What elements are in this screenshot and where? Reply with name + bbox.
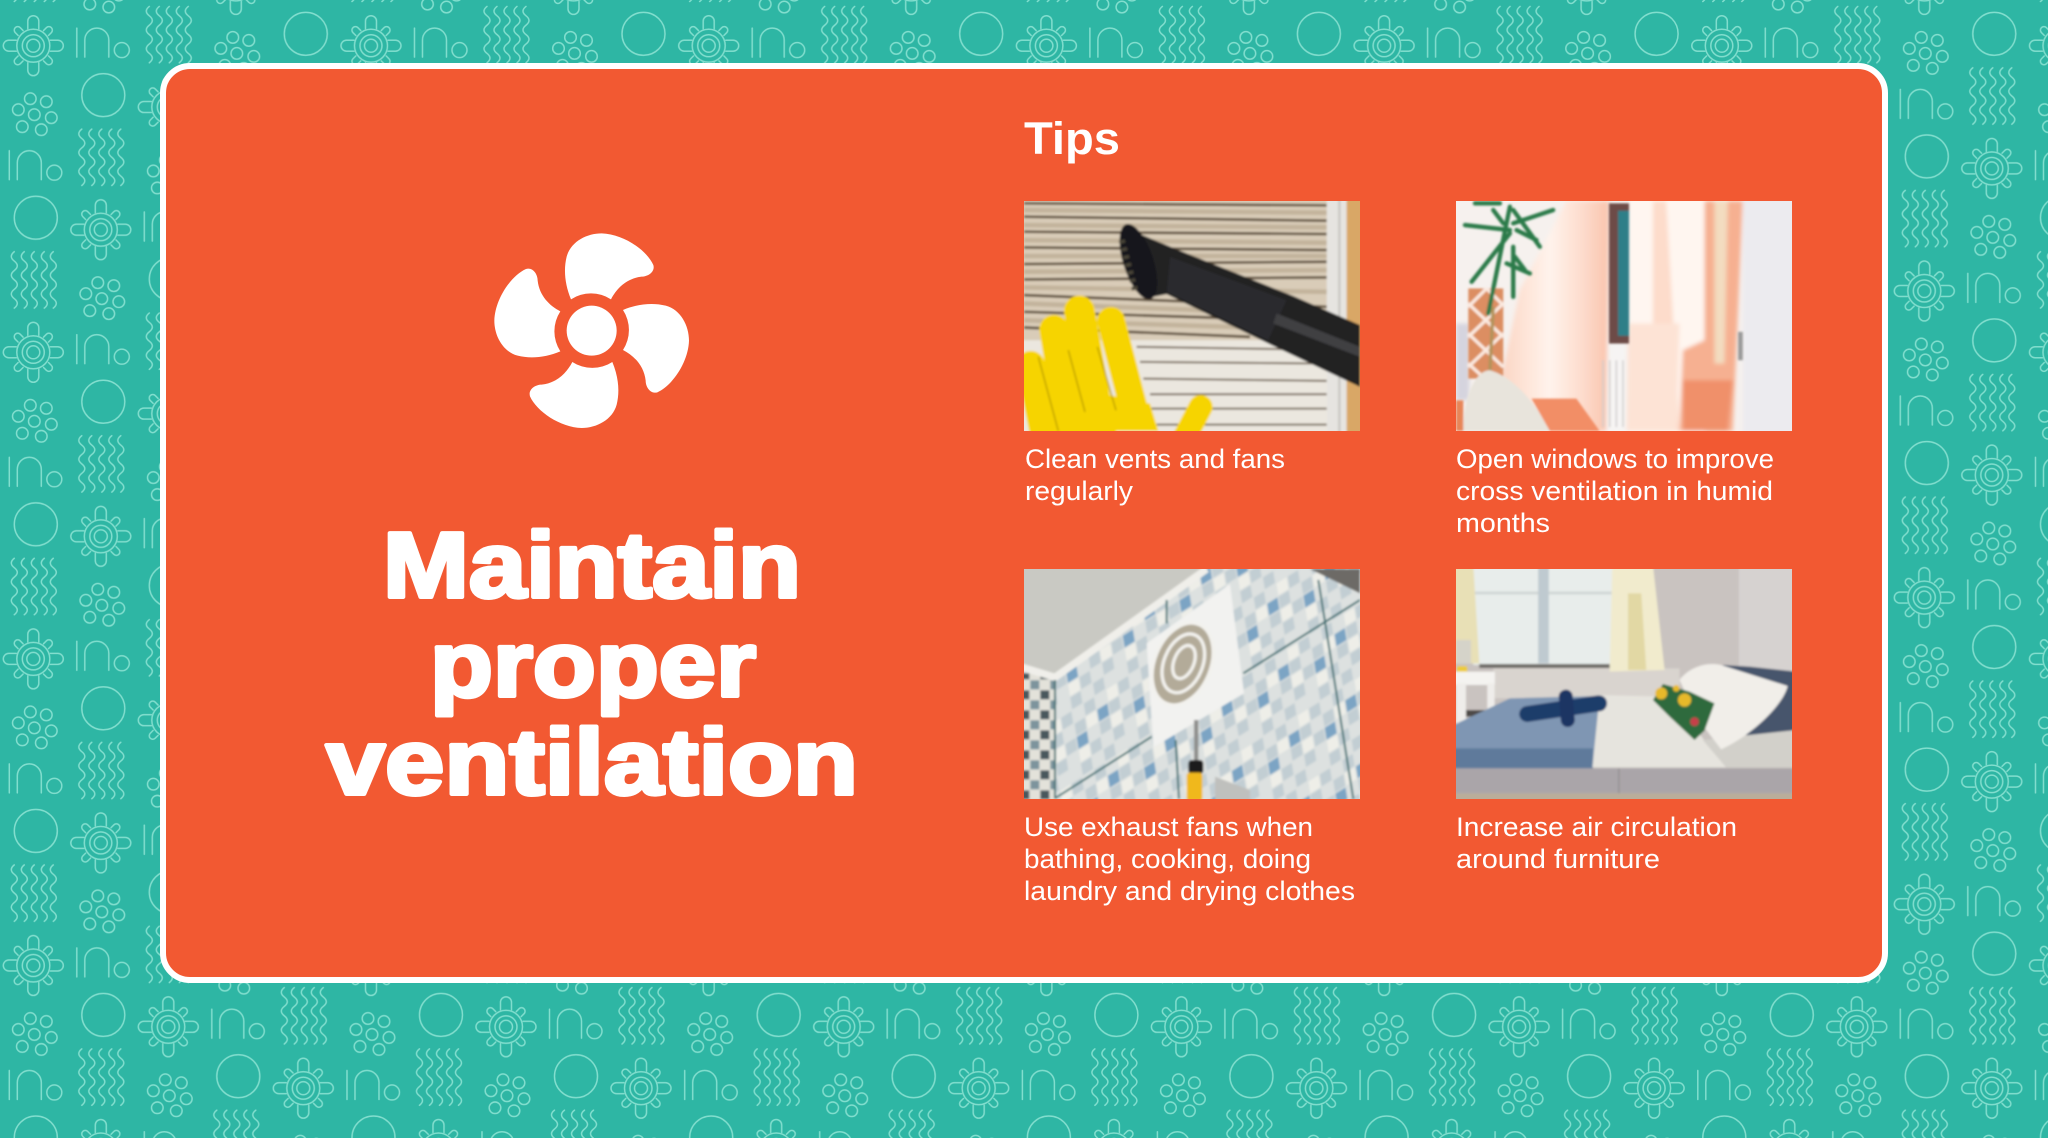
- title: ventilation: [326, 710, 858, 814]
- panel: main orange card: [163, 66, 1885, 980]
- caption: open windows: [1456, 444, 1774, 538]
- caption: open windows: Open windows to improve: [1456, 444, 1774, 474]
- photo: cleaning a vent with a vacuum: [1024, 201, 1360, 431]
- caption: clean vents: [1025, 444, 1285, 506]
- heading: tips: Tips: [1024, 113, 1120, 164]
- title: [326, 513, 858, 814]
- caption: air circulation: Increase air circulation: [1456, 812, 1737, 842]
- caption: exhaust fans: [1024, 812, 1355, 906]
- caption: clean vents: regularly: [1025, 476, 1134, 506]
- caption: clean vents: Clean vents and fans: [1025, 444, 1285, 474]
- icon: ventilation fan: [494, 233, 689, 428]
- caption: air circulation: [1456, 812, 1737, 874]
- photo: bathroom exhaust fan: [1024, 569, 1360, 799]
- photo: bedroom with airy furniture layout: [1456, 569, 1792, 799]
- title: proper: [430, 612, 756, 716]
- title: Maintain: [383, 513, 801, 617]
- caption: open windows: cross ventilation in humid: [1456, 476, 1773, 506]
- caption: exhaust fans: Use exhaust fans when: [1024, 812, 1313, 842]
- caption: air circulation: around furniture: [1456, 844, 1660, 874]
- caption: open windows: months: [1456, 508, 1550, 538]
- photo: open window with curtains: [1456, 201, 1792, 431]
- caption: exhaust fans: bathing, cooking, doing: [1024, 844, 1311, 874]
- caption: exhaust fans: laundry and drying clothes: [1024, 876, 1355, 906]
